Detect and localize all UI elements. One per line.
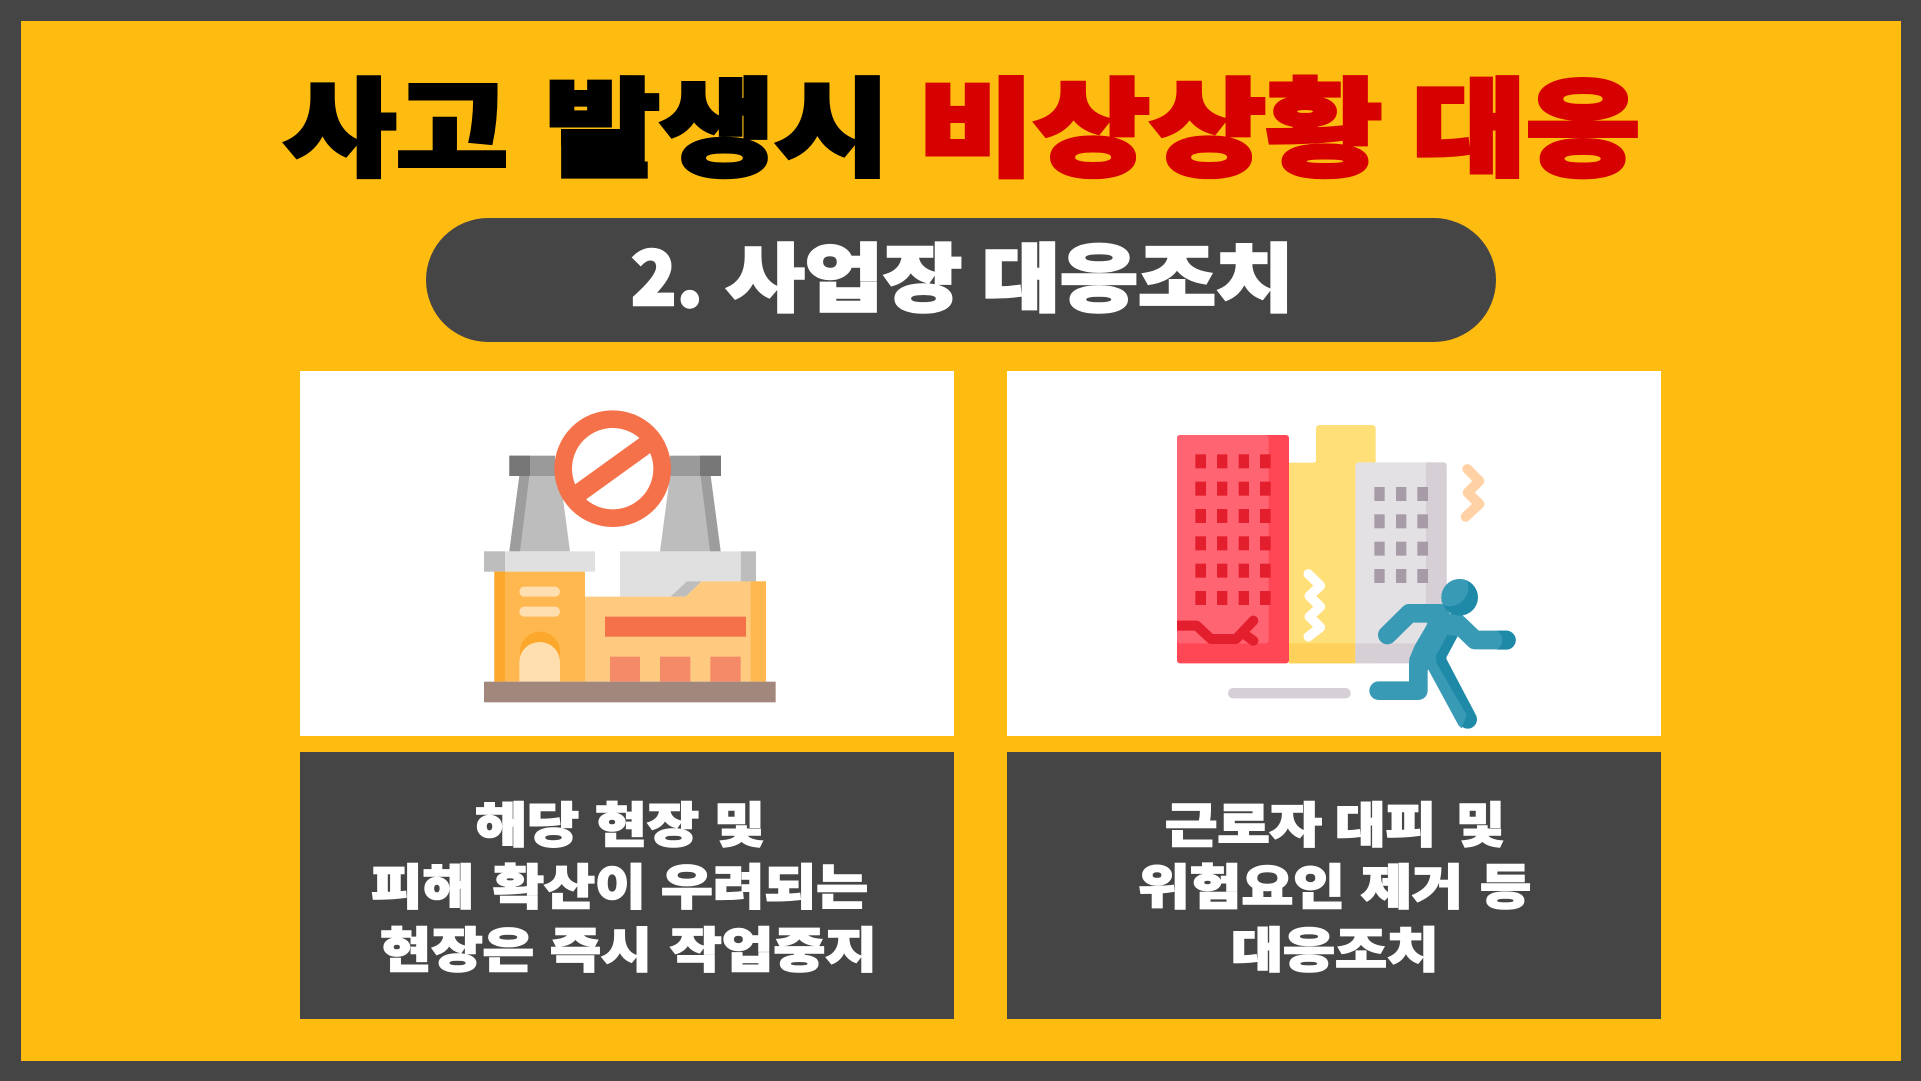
panel: left image card <box>300 371 954 736</box>
caption text: 현장 <box>595 786 699 856</box>
title black part <box>284 44 890 198</box>
caption text <box>1138 786 1531 981</box>
panel: right image card <box>1007 371 1661 736</box>
caption text: 현장은 <box>380 911 534 981</box>
subtitle text: 2. <box>631 220 703 327</box>
subtitle text: 대응조치 <box>982 220 1294 327</box>
caption text: 및 <box>714 786 765 856</box>
caption text <box>371 786 877 981</box>
subtitle text: 사업장 <box>726 220 962 327</box>
caption text: 대피 <box>1335 786 1436 856</box>
title red part <box>918 44 1640 198</box>
caption text: 및 <box>1456 786 1505 856</box>
subtitle pill <box>426 218 1496 342</box>
title black part: 사고 <box>284 44 508 198</box>
icon: factory with prohibition sign <box>484 419 776 702</box>
caption text: 위험요인 <box>1138 848 1345 918</box>
caption text: 즉시 <box>550 911 652 981</box>
caption text: 해당 <box>475 786 579 856</box>
caption text: 대응조치 <box>1231 911 1439 981</box>
title red part: 비상상황 <box>918 44 1382 198</box>
pill background <box>426 218 1496 342</box>
title red part: 대응 <box>1412 44 1640 198</box>
caption text: 피해 <box>371 848 474 918</box>
caption text: 우려되는 <box>661 848 868 918</box>
caption background <box>1007 752 1661 1019</box>
panel: left caption <box>300 752 954 1019</box>
caption text: 등 <box>1480 848 1531 918</box>
caption text: 근로자 <box>1165 786 1322 856</box>
caption text: 확산이 <box>493 848 646 918</box>
subtitle text <box>631 220 1294 327</box>
panel: right caption <box>1007 752 1661 1019</box>
icon: worker running away from collapsing buildings <box>1177 425 1516 728</box>
caption text: 제거 <box>1361 848 1463 918</box>
title black part: 발생시 <box>545 44 890 198</box>
caption background <box>300 752 954 1019</box>
caption text: 작업중지 <box>670 911 877 981</box>
title <box>284 44 1640 198</box>
